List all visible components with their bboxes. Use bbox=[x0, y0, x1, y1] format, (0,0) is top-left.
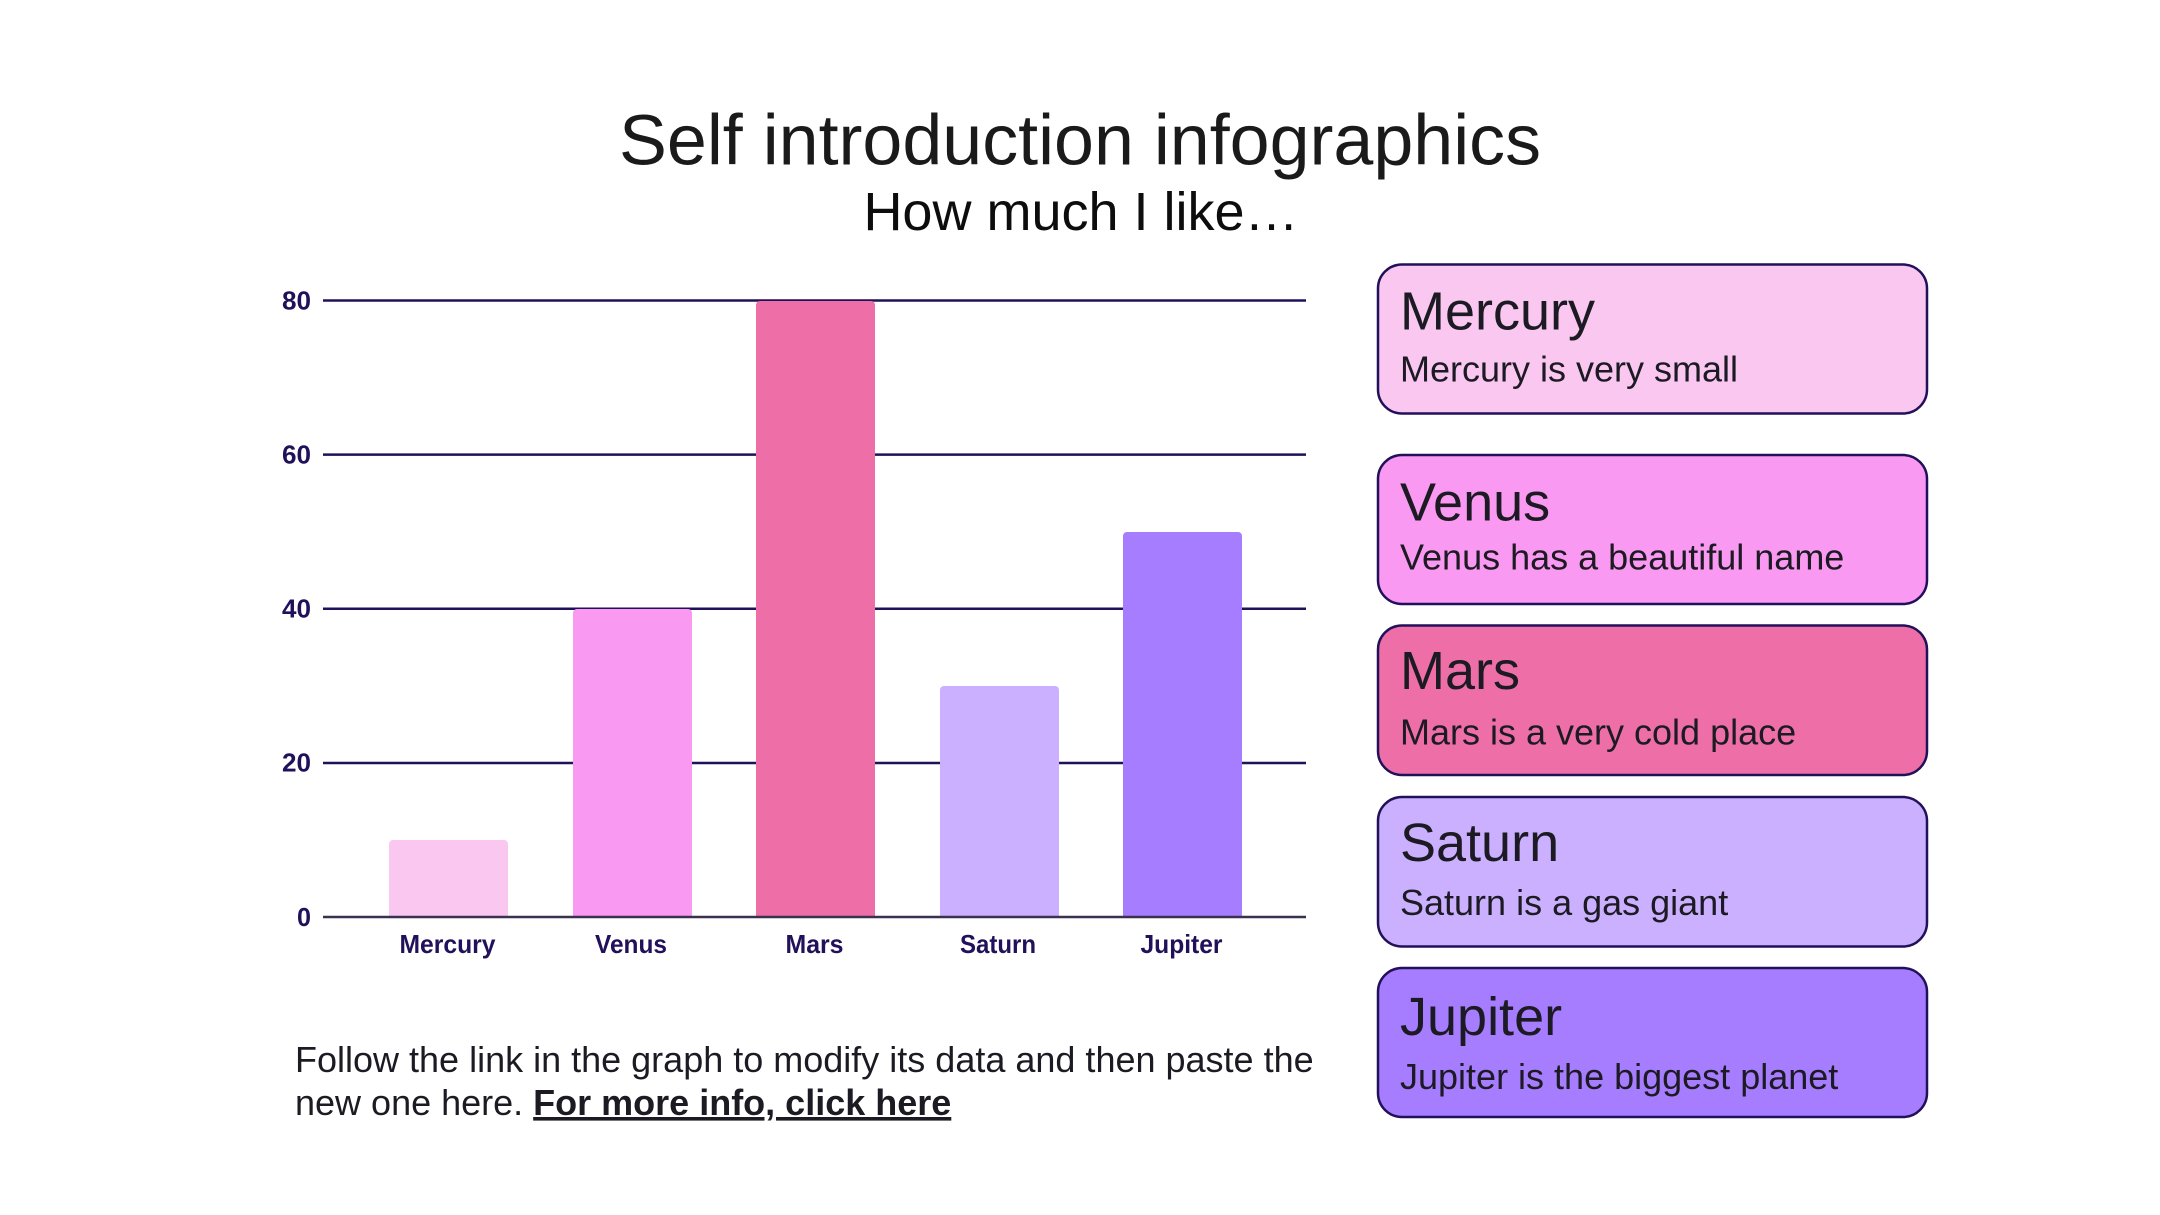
card: Mercury bbox=[1378, 264, 1927, 414]
card: Venus: Venus bbox=[1400, 472, 1550, 532]
x axis labels bbox=[400, 929, 1222, 959]
note text with link bbox=[295, 1039, 1314, 1123]
y axis grid and labels: 20 bbox=[282, 748, 311, 778]
y axis grid and labels: 60 bbox=[282, 440, 311, 470]
bar: Saturn bbox=[940, 686, 1059, 917]
card: Saturn: Saturn bbox=[1400, 813, 1559, 873]
title: Self introduction infographics bbox=[619, 100, 1541, 180]
x axis line bbox=[323, 916, 1306, 918]
card: Jupiter bbox=[1378, 968, 1927, 1117]
x axis labels: Venus bbox=[595, 929, 667, 959]
note text with link: Follow the link in the graph to modify its data and then paste the bbox=[295, 1039, 1314, 1080]
note text with link: new one here. For more info, click here bbox=[295, 1082, 951, 1123]
card: Mercury: Mercury bbox=[1400, 282, 1595, 342]
x axis labels: Mercury bbox=[400, 929, 496, 959]
card: Venus: Venus has a beautiful name bbox=[1400, 536, 1844, 578]
x axis labels: Mars bbox=[786, 929, 844, 959]
subtitle: How much I like… bbox=[863, 182, 1299, 242]
card: Saturn bbox=[1378, 797, 1927, 946]
card: Jupiter: Jupiter is the biggest planet bbox=[1400, 1056, 1838, 1097]
y axis grid and labels bbox=[282, 286, 1306, 932]
bar: Jupiter bbox=[1123, 532, 1242, 917]
card: Mars: Mars is a very cold place bbox=[1400, 712, 1796, 752]
card: Venus bbox=[1378, 455, 1927, 604]
bar: Venus bbox=[573, 609, 692, 917]
y axis grid and labels: 40 bbox=[282, 594, 311, 624]
card: Saturn: Saturn is a gas giant bbox=[1400, 882, 1728, 923]
bar: Mars bbox=[756, 301, 875, 917]
y axis grid and labels: 80 bbox=[282, 286, 311, 316]
card: Mars bbox=[1378, 626, 1927, 775]
card: Jupiter: Jupiter bbox=[1400, 987, 1562, 1047]
bar: Mercury bbox=[389, 840, 508, 917]
bar chart bbox=[282, 286, 1306, 959]
y axis grid and labels: 0 bbox=[297, 902, 311, 932]
x axis labels: Saturn bbox=[960, 929, 1036, 959]
card: Mars: Mars bbox=[1400, 641, 1520, 701]
card: Mercury: Mercury is very small bbox=[1400, 348, 1738, 390]
x axis labels: Jupiter bbox=[1140, 929, 1222, 959]
